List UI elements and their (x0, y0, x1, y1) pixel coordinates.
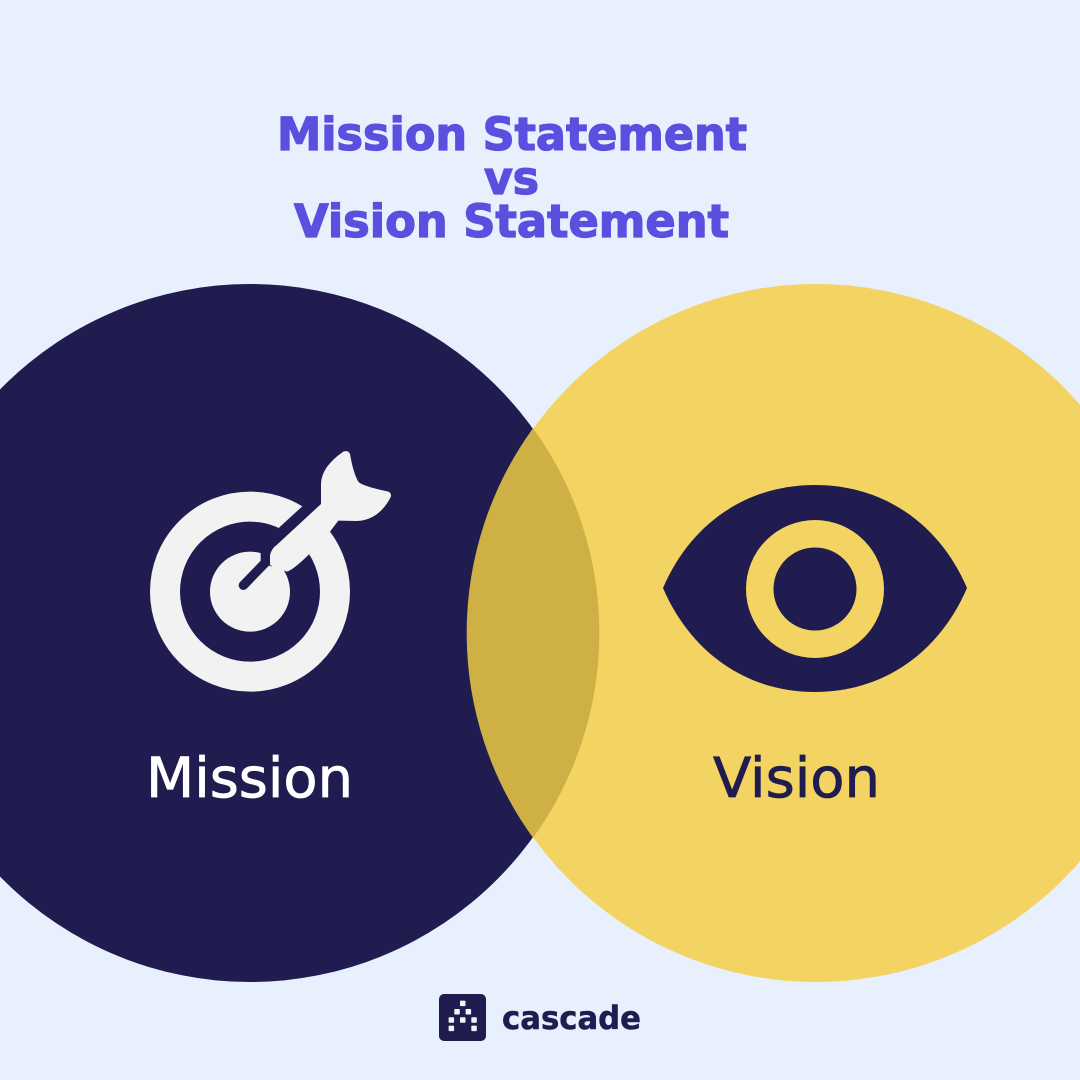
icon: target with dart (165, 451, 391, 677)
title: Mission Statement (277, 108, 747, 161)
overlap of the two circles (467, 429, 599, 837)
title: vs (484, 152, 539, 205)
icon: eye (663, 485, 967, 692)
logo: cascade wordmark: cascade (502, 999, 641, 1037)
panel: vision circle (467, 284, 1080, 982)
title (277, 108, 747, 248)
label: Vision: Vision (713, 746, 880, 810)
panel: mission circle (0, 284, 599, 982)
logo: cascade icon (439, 994, 486, 1041)
title: Vision Statement (294, 195, 729, 248)
label: Mission: Mission (146, 746, 353, 810)
